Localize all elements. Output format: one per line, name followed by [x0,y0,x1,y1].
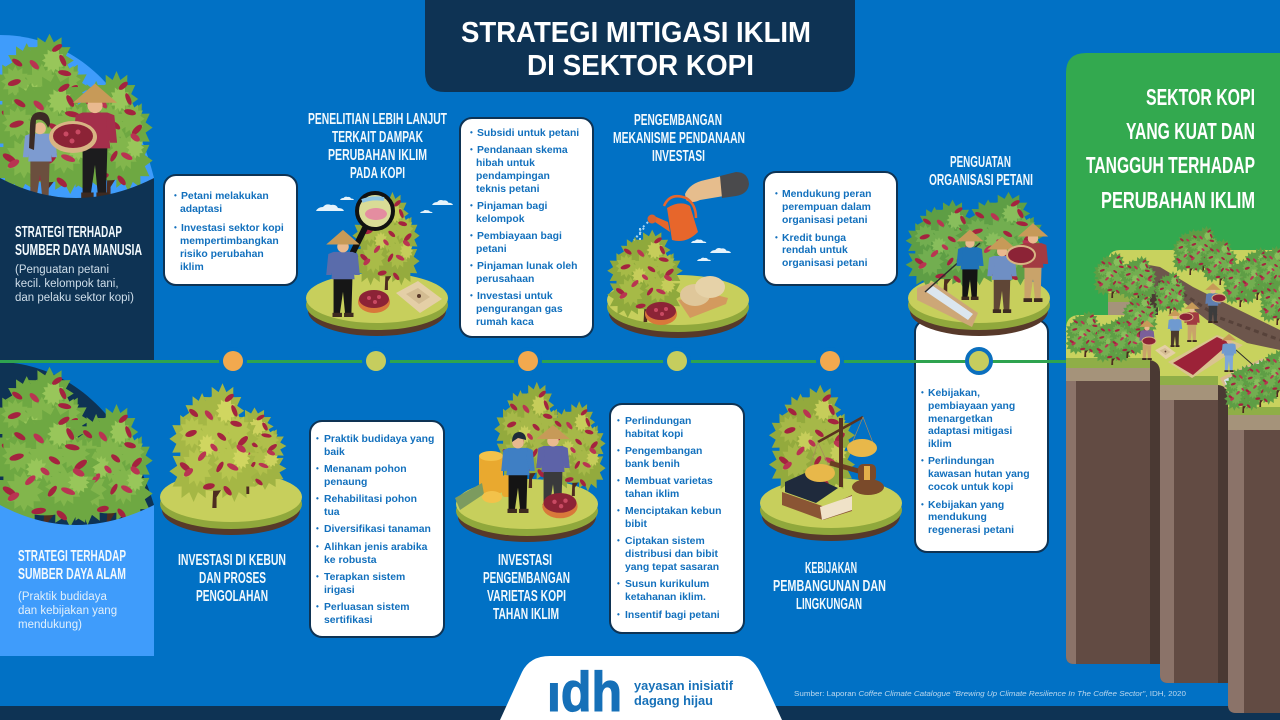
man one [501,426,535,513]
logo text: dagang hijau [634,694,713,708]
heading: varietas: INVESTASI [498,552,552,569]
heading: organisasi: ORGANISASI PETANI [929,172,1033,189]
card: praktik budidaya: • [316,434,319,443]
description: dan pelaku sektor kopi) [15,292,134,304]
node 6 [967,349,991,373]
card: praktik budidaya: • [316,464,319,473]
panel: natural resources strategy [0,362,154,656]
card: adaptasi petani: iklim [180,262,204,273]
processing trough [917,243,980,327]
gold coins [455,451,516,510]
heading: pendanaan: INVESTASI [652,148,705,165]
card: varietas list: Perlindungan [625,416,691,427]
card: adaptasi petani: risiko perubahan [180,249,264,260]
description: kecil. kelompok tani, [15,278,119,290]
card: praktik budidaya: • [316,542,319,551]
heading: penelitian: PADA KOPI [350,165,405,182]
heading: investasi kebun: INVESTASI DI KEBUN [178,552,286,569]
node 4 [663,347,691,375]
heading: varietas: VARIETAS KOPI [487,588,566,605]
man two [536,425,570,508]
coffee basket [1007,246,1035,264]
cliff two [1160,376,1228,683]
node 5 [816,347,844,375]
card: pendanaan: Investasi untuk [477,291,553,302]
card: varietas list: bibit [625,519,647,530]
card: varietas list: • [617,579,620,588]
panel: human resources strategy [0,34,154,360]
illustration: coffee bushes [0,367,153,533]
card: adaptasi petani: • [174,223,177,232]
coffee bowl [542,493,578,518]
heading: investasi kebun [178,552,286,605]
timeline [0,347,1066,375]
card: pendanaan: • [470,231,473,240]
node 3 [514,347,542,375]
node 2 [362,347,390,375]
card: pendanaan: Pinjaman bagi [477,201,548,212]
card: organisasi: • [775,233,778,242]
heading: pendanaan: MEKANISME PENDANAAN [613,130,745,147]
coffee bowl [645,302,677,325]
small farmers [1139,283,1236,372]
illustration: funding island [607,172,749,338]
farmer two [987,237,1017,313]
light blue panel [0,505,154,656]
clouds [316,197,453,213]
card: organisasi: Kredit bunga [782,233,846,244]
card: pendanaan: • [470,261,473,270]
card: praktik budidaya: Alihkan jenis arabika [324,542,428,553]
card: varietas list: Insentif bagi petani [625,610,720,621]
illustration: investasi kebun island [160,383,302,535]
logo plate [500,656,782,720]
card: praktik budidaya: sertifikasi [324,615,373,626]
card: praktik budidaya: penaung [324,477,367,488]
title banner: DI SEKTOR KOPI [527,50,754,82]
coffee bowl [358,290,390,313]
card: praktik budidaya: • [316,602,319,611]
coffee bush [352,192,420,290]
upper plateau [1108,250,1280,425]
heading: varietas [483,552,570,623]
illustration: farmer organisation island [906,192,1050,336]
card: praktik budidaya: • [316,494,319,503]
card: praktik budidaya: irigasi [324,585,355,596]
card: praktik budidaya: • [316,524,319,533]
logo text: yayasan inisiatif [634,679,734,693]
cliff one [1066,358,1160,664]
card: kebijakan: • [921,456,924,465]
card: varietas list: habitat kopi [625,429,683,440]
card: pendanaan: • [470,201,473,210]
water drops [634,222,648,240]
books [782,473,852,520]
card: organisasi: • [775,189,778,198]
heading: SUMBER DAYA ALAM [18,566,126,583]
heading: STRATEGI TERHADAP [15,224,122,241]
card: praktik budidaya: Diversifikasi tanaman [324,524,431,535]
heading: penelitian: PERUBAHAN IKLIM [328,147,427,164]
bottom band [0,706,1280,720]
card: varietas list: Pengembangan [625,446,702,457]
card: kebijakan: Kebijakan yang [928,500,1004,511]
card: adaptasi petani: • [174,191,177,200]
source note: Sumber: Laporan Coffee Climate Catalogue "Brewing Up Climate Resilience In The Coffee Sector" , IDH, 2020 [794,689,1186,698]
coffee sack [396,281,442,313]
card: adaptasi petani [164,175,297,285]
card: kebijakan: menargetkan [928,414,993,425]
card: pendanaan: • [470,128,473,137]
illustration: coffee basket [49,121,97,153]
sacks on pallet [678,276,728,318]
small coffee bushes [1065,226,1280,413]
farmer three [1018,223,1048,302]
coffee bush [769,385,855,498]
card: praktik budidaya: baik [324,447,345,458]
card: pendanaan: kelompok [476,214,525,225]
description: (Penguatan petani [15,264,109,276]
card: organisasi: organisasi petani [782,258,868,269]
card: pendanaan: Pendanaan skema [477,145,568,156]
card: varietas list: • [617,416,620,425]
card: varietas list: Ciptakan sistem [625,536,705,547]
heading: penelitian: TERKAIT DAMPAK [332,129,423,146]
heading: investasi kebun: DAN PROSES [199,570,266,587]
clouds [691,239,731,261]
card: adaptasi petani: adaptasi [180,204,222,215]
card: pendanaan: pendampingan [476,171,550,182]
card: praktik budidaya: Menanam pohon [324,464,407,475]
card: pendanaan: Pinjaman lunak oleh [477,261,577,272]
title banner [425,0,855,92]
card: pendanaan: pengurangan gas [476,304,563,315]
card: kebijakan: adaptasi mitigasi [928,426,1012,437]
heading: SUMBER DAYA MANUSIA [15,242,142,259]
card: kebijakan: cocok untuk kopi [928,482,1014,493]
description: (Praktik budidaya [18,591,107,603]
card: organisasi: rendah untuk [782,245,848,256]
card: kebijakan: mendukung [928,512,987,523]
coffee bushes [906,192,1045,292]
card: varietas list: ketahanan iklim. [625,592,706,603]
watering can [648,196,698,241]
heading: varietas: PENGEMBANGAN [483,570,570,587]
coffee sack [1155,345,1176,359]
balance scale [805,417,877,487]
card: pendanaan: teknis petani [476,184,540,195]
heading: kebijakan: PEMBANGUNAN DAN [773,578,886,595]
illustration: kebijakan island [760,385,902,541]
coffee bush [208,407,286,494]
card: praktik budidaya: ke robusta [324,555,377,566]
hand with sleeve [685,172,749,202]
heading: penelitian [308,111,447,182]
card: praktik budidaya: tua [324,507,340,518]
heading: varietas: TAHAN IKLIM [493,606,559,623]
card: varietas list: • [617,536,620,545]
card: adaptasi petani: Petani melakukan [181,191,269,202]
card: praktik budidaya: Praktik budidaya yang [324,434,434,445]
description: mendukung) [18,619,82,631]
washing trough [1220,350,1267,389]
card: varietas list: • [617,610,620,619]
card: pendanaan: hibah untuk [476,158,535,169]
heading: STRATEGI TERHADAP [18,548,126,565]
illustration: varietas island [455,382,606,542]
heading: kebijakan: KEBIJAKAN [805,560,857,577]
card: kebijakan: regenerasi petani [928,525,1014,536]
coffee bush front [169,383,259,508]
description: dan kebijakan yang [18,605,117,617]
heading: penelitian: PENELITIAN LEBIH LANJUT [308,111,447,128]
node 1 [219,347,247,375]
illustration: farmer woman [23,111,57,200]
card: pendanaan: rumah kaca [476,317,534,328]
card: varietas list: • [617,446,620,455]
card: kebijakan: kawasan hutan yang [928,469,1030,480]
card: pendanaan: Pembiayaan bagi [477,231,562,242]
card: praktik budidaya: Rehabilitasi pohon [324,494,417,505]
illustration: research island [306,192,453,336]
card: varietas list: tahan iklim [625,489,679,500]
illustration: coffee bushes [0,34,153,200]
card: varietas list: Membuat varietas [625,476,713,487]
card: kebijakan: Perlindungan [928,456,994,467]
gavel [830,463,884,495]
card: pendanaan: • [470,145,473,154]
card: praktik budidaya: • [316,572,319,581]
farmer one [956,229,984,300]
card: pendanaan: Subsidi untuk petani [477,128,579,139]
drying bed [1168,335,1243,378]
card: pendanaan [460,118,593,337]
card: varietas list: Menciptakan kebun [625,506,721,517]
card: praktik budidaya [310,421,444,637]
card: adaptasi petani: mempertimbangkan [180,236,279,247]
heading: pendanaan: PENGEMBANGAN [634,112,722,129]
coffee bushes [494,382,606,496]
heading: organisasi: PENGUATAN [950,154,1011,171]
card: adaptasi petani: Investasi sektor kopi [181,223,284,234]
illustration: farmer man [73,83,117,198]
cliff three [1228,407,1280,713]
coffee bush [607,230,683,322]
heading: kebijakan [773,560,886,613]
card: varietas list: yang tepat sasaran [625,562,719,573]
card: kebijakan: • [921,388,924,397]
card: varietas list: distribusi dan bibit [625,549,718,560]
card: kebijakan: iklim [928,439,952,450]
illustration: navy panel [0,178,154,360]
card: praktik budidaya: Terapkan sistem [324,572,405,583]
card: organisasi [764,172,897,285]
card: praktik budidaya: Perluasan sistem [324,602,409,613]
card: pendanaan: perusahaan [476,274,534,285]
card: pendanaan: petani [476,244,507,255]
heading: kebijakan: LINGKUNGAN [796,596,862,613]
card: varietas list [610,404,744,633]
farmer [326,230,360,317]
card: varietas list: • [617,506,620,515]
card: kebijakan [915,320,1048,552]
card: organisasi: Mendukung peran [782,189,871,200]
card: varietas list: bank benih [625,459,680,470]
card: pendanaan: • [470,291,473,300]
card: varietas list: • [617,476,620,485]
title banner: STRATEGI MITIGASI IKLIM [461,17,811,49]
card: organisasi: perempuan dalam [782,202,871,213]
card: varietas list: Susun kurikulum [625,579,709,590]
lower plateau surface [1066,315,1160,362]
magnifying glass [353,193,393,252]
card: organisasi: organisasi petani [782,215,868,226]
card: kebijakan: pembiayaan yang [928,401,1015,412]
road [1133,262,1280,350]
heading [15,224,142,259]
heading: pendanaan [613,112,745,165]
heading: organisasi [929,154,1033,189]
heading: investasi kebun: PENGOLAHAN [196,588,268,605]
heading [1086,84,1255,213]
panel: resilient coffee sector [1065,53,1280,713]
heading [18,548,126,583]
card: kebijakan: Kebijakan, [928,388,980,399]
card: kebijakan: • [921,500,924,509]
